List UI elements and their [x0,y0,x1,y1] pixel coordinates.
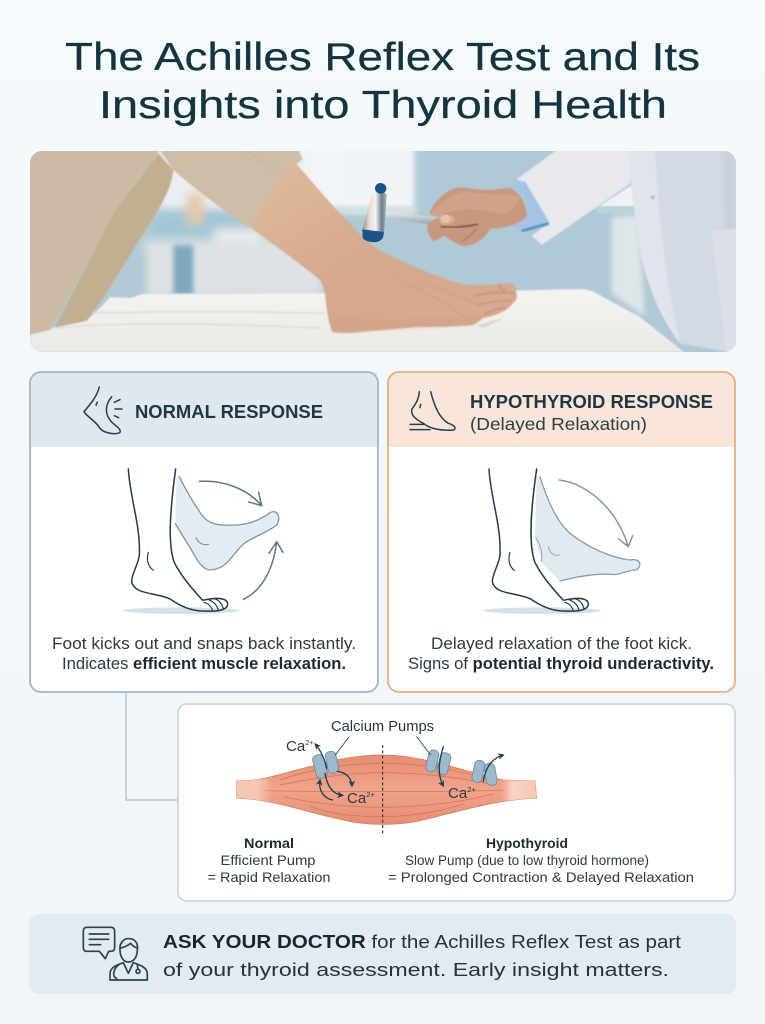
bed [30,289,684,352]
divider: normal vs hypothyroid [381,745,384,835]
calcium ion labels: 2+ [467,785,476,794]
panel: muscle and calcium pumps [178,704,735,901]
photo: doctor tapping the Achilles tendon with a reflex hammer [28,143,737,353]
caption: normal [208,835,330,885]
caption: hypothyroid [388,835,694,885]
caption: normal: Normal [244,835,294,851]
doctor: coat, sleeve, cuff, hand and hammer [362,150,737,353]
icon: foot with motion ticks [84,387,122,434]
illustration: foot kicks out and snaps back [123,469,283,614]
panel: normal response [30,372,378,692]
icon: doctor with speech bubble [83,927,147,980]
description: hypothyroid: Delayed relaxation of the foot kick. [431,634,692,653]
call to action text [163,932,681,980]
calcium ion labels: Ca [347,790,366,807]
title [65,36,700,127]
caption: hypothyroid: Slow Pump (due to low thyroid hormone) [405,852,649,868]
title: The Achilles Reflex Test and Its [65,36,700,79]
illustration: foot with delayed relaxation [484,469,640,614]
subheading: delayed relaxation: (Delayed Relaxation) [470,414,647,434]
calcium pump channels [312,749,498,786]
caption: hypothyroid: = Prolonged Contraction & Delayed Relaxation [388,869,694,885]
sleeve [517,150,631,245]
description: normal: Foot kicks out and snaps back instantly. [52,634,356,653]
description: normal [52,634,356,673]
icon: foot with slow lines [410,392,455,430]
title: Insights into Thyroid Health [99,84,667,127]
caption: normal: = Rapid Relaxation [208,869,330,885]
calcium ion labels: 2+ [305,738,314,747]
cuff [508,182,549,233]
pump leader lines and flow arrows [315,737,503,800]
muscle diagram [237,737,537,835]
trousers [28,150,303,334]
hand [427,188,527,246]
calcium ion labels: 2+ [366,790,375,799]
caption: hypothyroid: Hypothyroid [486,835,568,851]
panel: hypothyroid response [388,372,736,692]
call to action text: of your thyroid assessment. Early insight matters. [163,960,669,980]
card header: hypothyroid [389,372,735,447]
connector line from normal card to muscle panel [126,692,178,800]
heading: hypothyroid response: HYPOTHYROID RESPONSE [470,391,713,412]
call to action text: ASK YOUR DOCTOR for the Achilles Reflex Test as part [163,932,681,952]
blurred room, left side [140,151,418,294]
blurred room, right side [347,147,645,317]
description: hypothyroid [408,634,714,673]
leg and foot [250,160,517,333]
calcium ion labels [286,738,476,807]
calcium ion labels: Ca [286,738,305,755]
callout: ask your doctor [29,914,736,994]
label: calcium pumps: Calcium Pumps [331,719,434,735]
coat body [646,151,736,352]
description: normal: Indicates efficient muscle relaxation. [62,654,346,673]
handle [386,212,438,224]
description: hypothyroid: Signs of potential thyroid underactivity. [408,654,714,673]
calcium ion labels: Ca [448,785,467,802]
caption: normal: Efficient Pump [220,852,316,868]
hammer head [362,191,387,234]
card header: normal [31,372,377,447]
heading: normal response: NORMAL RESPONSE [135,401,323,422]
